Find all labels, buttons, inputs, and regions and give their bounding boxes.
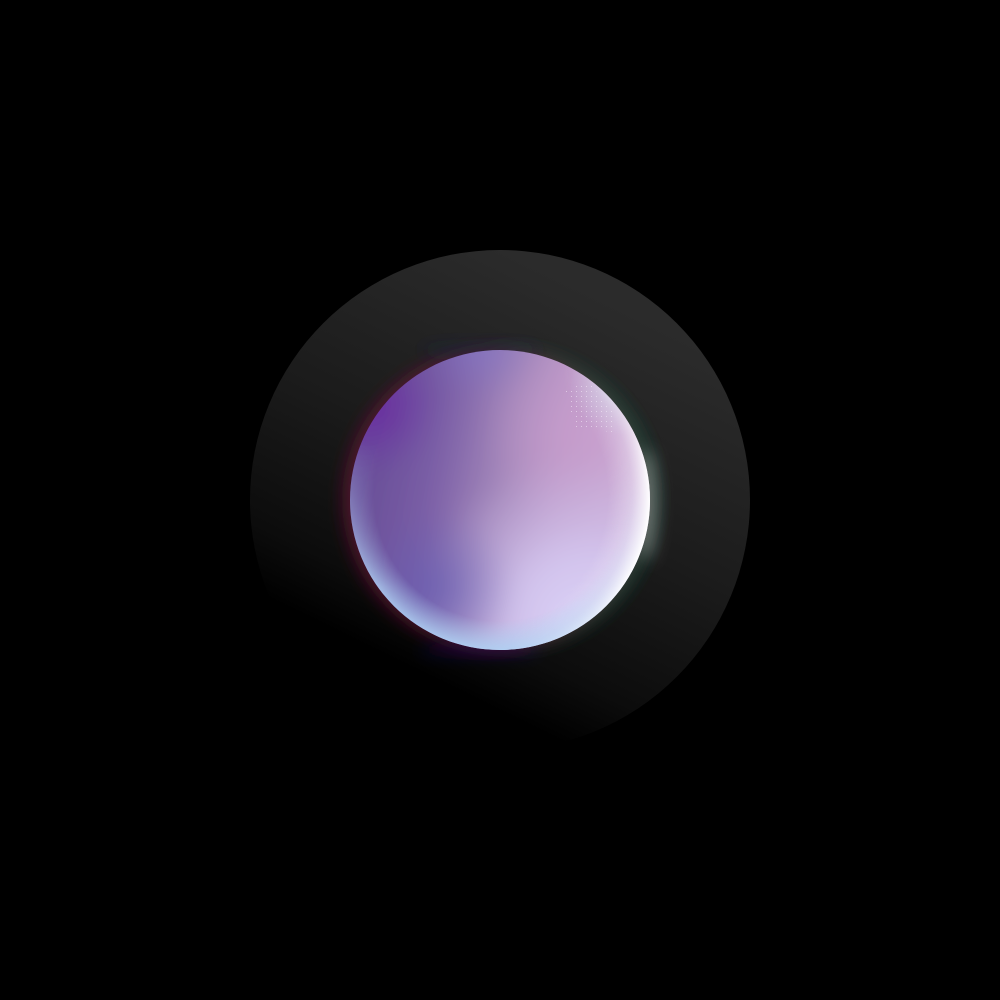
lower cool rim [350, 454, 643, 650]
upper left violet patch [360, 376, 426, 456]
halo disc [250, 250, 750, 750]
upper lilac patch [508, 391, 556, 454]
upper right pale rim [580, 374, 625, 420]
sphere glow [343, 346, 657, 655]
orb illustration [250, 250, 750, 722]
upper right dither dots [565, 384, 612, 432]
lower left blue patch [404, 530, 506, 635]
sphere [350, 350, 650, 650]
top blue tint [448, 350, 502, 373]
right white rim [532, 374, 650, 646]
sphere soft colour layers [350, 350, 650, 650]
lower light highlight [440, 486, 624, 650]
sphere base shading [350, 350, 650, 650]
